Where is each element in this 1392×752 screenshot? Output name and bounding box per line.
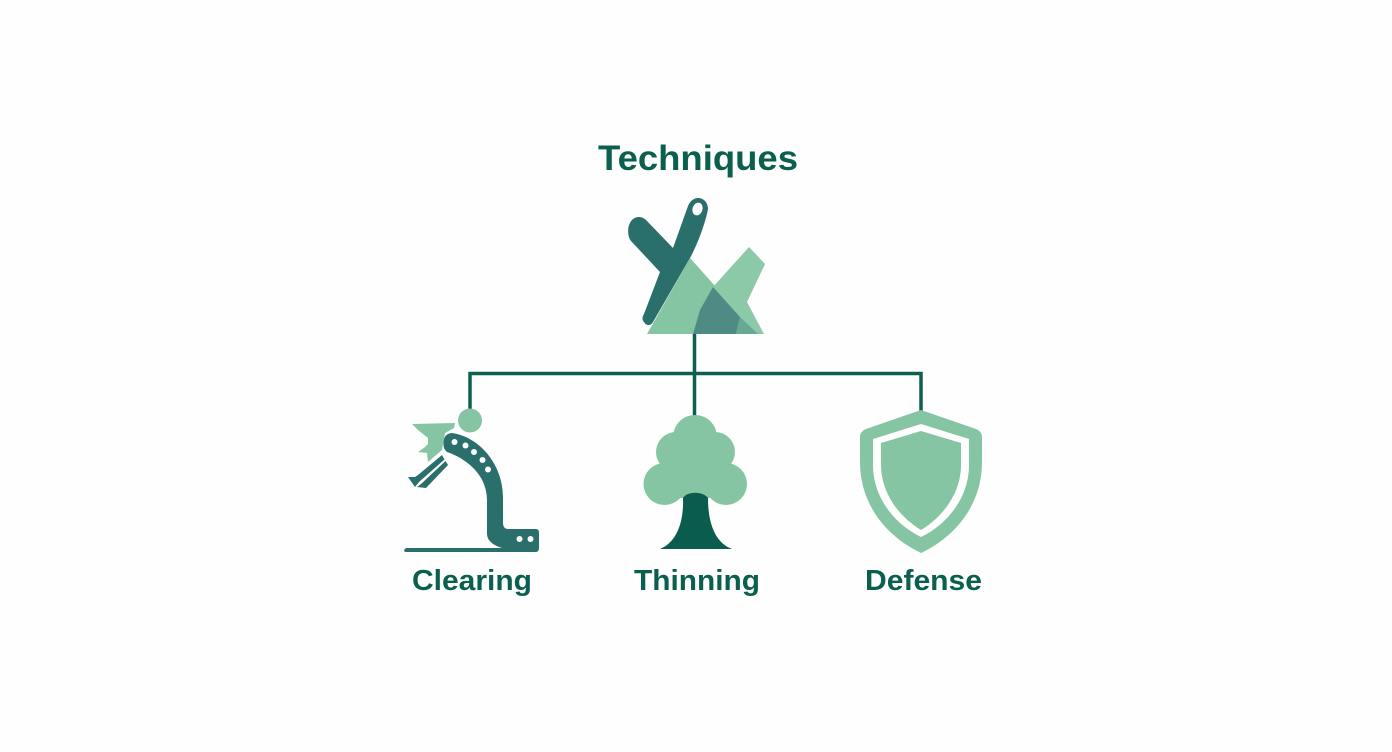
icon: clearing machine [404, 408, 539, 552]
icon: defense shield [860, 410, 982, 553]
label: thinning: Thinning [634, 565, 760, 597]
label: clearing: Clearing [412, 565, 532, 597]
icon: techniques crossed tools [628, 198, 765, 334]
title: Techniques [598, 139, 798, 178]
label: defense: Defense [865, 565, 982, 597]
icon: thinning tree [644, 415, 747, 549]
connector lines [470, 334, 921, 416]
